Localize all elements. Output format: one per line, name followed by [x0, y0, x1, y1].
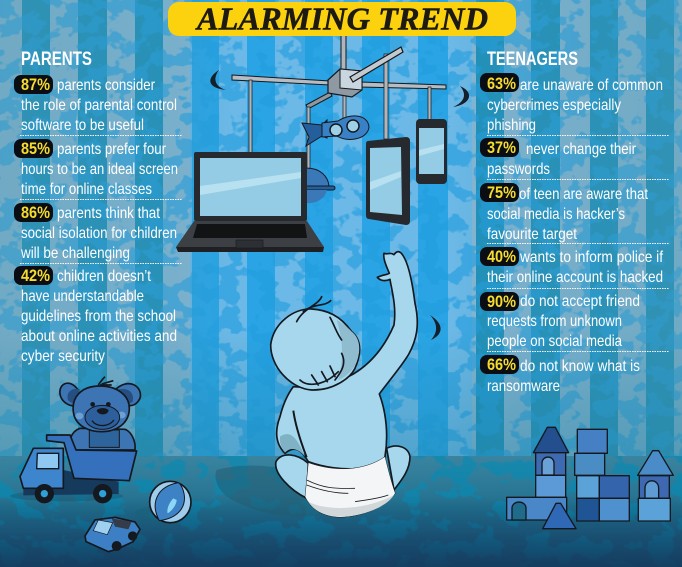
stat: 40% teenagers: 40%	[487, 247, 516, 266]
right tower roof	[638, 451, 673, 475]
stat: 66% teenagers	[480, 355, 640, 395]
panel: parents	[14, 49, 182, 365]
icon: smartphone	[416, 119, 447, 184]
stat: 63% teenagers: 63%	[487, 74, 516, 93]
teddy inner ears	[67, 389, 133, 405]
teddy eyes and nose	[90, 402, 111, 414]
truck chassis	[23, 470, 119, 495]
icon: sound wiggle left	[210, 70, 226, 90]
low arch block	[507, 497, 567, 520]
teddy mouth	[92, 420, 114, 426]
truck dump bed	[47, 435, 137, 481]
stat: 87% parents: parents consider	[57, 77, 156, 94]
stat: 87% parents: software to be useful	[21, 117, 144, 134]
icon: laptop	[176, 152, 324, 252]
stat: 85% parents: hours to be an ideal screen	[21, 161, 178, 178]
heading: teenagers: TEENAGERS	[487, 49, 578, 70]
right tower base block	[638, 498, 670, 521]
stat: 90% teenagers: 90%	[487, 292, 516, 311]
stat: 87% parents	[14, 75, 177, 134]
truck wheels	[35, 484, 54, 503]
baby ear	[337, 320, 359, 380]
stat: 42% children: guidelines from the school	[21, 308, 176, 325]
stat: 85% parents	[14, 139, 178, 198]
stat: 86% parents	[14, 203, 177, 262]
stat: 63% teenagers	[480, 73, 663, 134]
stat: 75% teenagers: social media is hacker’s	[487, 206, 625, 223]
toy: building blocks	[507, 427, 673, 529]
icon: sound wiggle near arm	[430, 315, 441, 340]
left tower middle block	[536, 475, 566, 497]
teddy cheeks	[75, 412, 126, 419]
left tower arch	[542, 457, 554, 475]
centre top block	[577, 429, 607, 453]
low arch opening	[512, 502, 526, 520]
baby legs	[276, 446, 410, 498]
stat: 42% children: cyber security	[21, 348, 105, 365]
beach ball	[150, 481, 191, 523]
stat: 87% parents: 87%	[21, 75, 50, 94]
teddy body	[69, 428, 135, 450]
teddy head	[73, 386, 129, 432]
icon: sound wiggle right	[453, 86, 469, 107]
stat: 90% teenagers: people on social media	[487, 333, 622, 350]
stat: 75% teenagers	[480, 183, 648, 243]
teddy muzzle	[85, 405, 120, 429]
stat: 37% teenagers	[480, 138, 637, 178]
stat: 75% teenagers: of teen are aware that	[519, 186, 648, 203]
stat: 90% teenagers	[480, 292, 640, 350]
stat: 85% parents: parents prefer four	[57, 141, 167, 158]
truck shadow	[10, 491, 123, 501]
stat: 42% children: about online activities and	[21, 328, 177, 345]
front triangle block	[543, 503, 576, 529]
teddy ears	[60, 383, 140, 406]
icon: tablet	[366, 137, 410, 225]
toy car	[85, 517, 140, 552]
icon: hanging rocket toy	[302, 116, 369, 146]
baby body and arm	[277, 252, 417, 469]
stat: 86% parents: social isolation for children	[21, 225, 177, 242]
right tower arch	[645, 481, 659, 498]
title text: ALARMING TREND	[195, 0, 488, 36]
icon: hanging ball toy	[305, 168, 335, 203]
beach ball stripes	[155, 483, 184, 521]
beach ball shadow	[135, 507, 168, 521]
left tower arch block	[536, 453, 566, 475]
baby reaching up	[215, 252, 417, 517]
stat: 66% teenagers: 66%	[487, 355, 516, 374]
baby back shadow	[280, 434, 305, 457]
baby back crease	[293, 411, 307, 457]
stat: 86% parents: parents think that	[57, 205, 160, 222]
baby diaper	[305, 457, 395, 517]
toy car windscreen	[93, 520, 113, 535]
teddy belly	[89, 430, 119, 447]
title banner	[168, 0, 516, 36]
stat: 37% teenagers: passwords	[487, 161, 550, 178]
left tower roof	[533, 427, 569, 453]
panel: teenagers	[480, 49, 669, 395]
stat: 87% parents: the role of parental control	[21, 97, 177, 114]
stat: 75% teenagers: favourite target	[487, 226, 577, 243]
truck cab	[20, 448, 63, 488]
baby head	[271, 309, 360, 390]
stat: 42% children: children doesn’t	[57, 268, 151, 285]
stat: 66% teenagers: do not know what is	[520, 358, 640, 375]
stat: 42% children	[14, 266, 177, 365]
centre second block	[575, 453, 605, 475]
stat: 42% children: 42%	[21, 266, 50, 285]
stat: 63% teenagers: phishing	[487, 117, 536, 134]
truck window	[37, 453, 59, 469]
stat: 86% parents: 86%	[21, 203, 50, 222]
right tower arch block	[639, 476, 669, 498]
stat: 42% children: have understandable	[21, 288, 144, 305]
stat: 40% teenagers	[480, 247, 663, 286]
stat: 90% teenagers: do not accept friend	[520, 293, 640, 310]
diaper lower fold	[308, 495, 394, 517]
stat: 86% parents: will be challenging	[20, 245, 130, 262]
teddy tuft	[98, 377, 113, 385]
centre square blocks	[577, 476, 599, 498]
stat: 66% teenagers: ransomware	[487, 378, 560, 395]
stat: 75% teenagers: 75%	[487, 183, 516, 202]
stat: 37% teenagers: never change their	[526, 141, 637, 158]
stat: 85% parents: time for online classes	[21, 181, 152, 198]
diaper crease lines	[307, 480, 388, 502]
toy car wheels	[112, 541, 122, 551]
toy car roof	[112, 518, 132, 529]
toy: teddy bear on dump truck	[10, 377, 191, 552]
stat: 63% teenagers: cybercrimes especially	[487, 97, 621, 114]
stat: 85% parents: 85%	[21, 139, 50, 158]
heading: parents: PARENTS	[21, 49, 92, 70]
mobile: hanging rods	[232, 34, 446, 172]
baby floor shadow	[215, 466, 320, 517]
stat: 37% teenagers: 37%	[487, 138, 516, 157]
baby hair	[297, 297, 344, 385]
stat: 90% teenagers: requests from unknown	[487, 313, 622, 330]
beach ball highlight	[167, 498, 177, 513]
